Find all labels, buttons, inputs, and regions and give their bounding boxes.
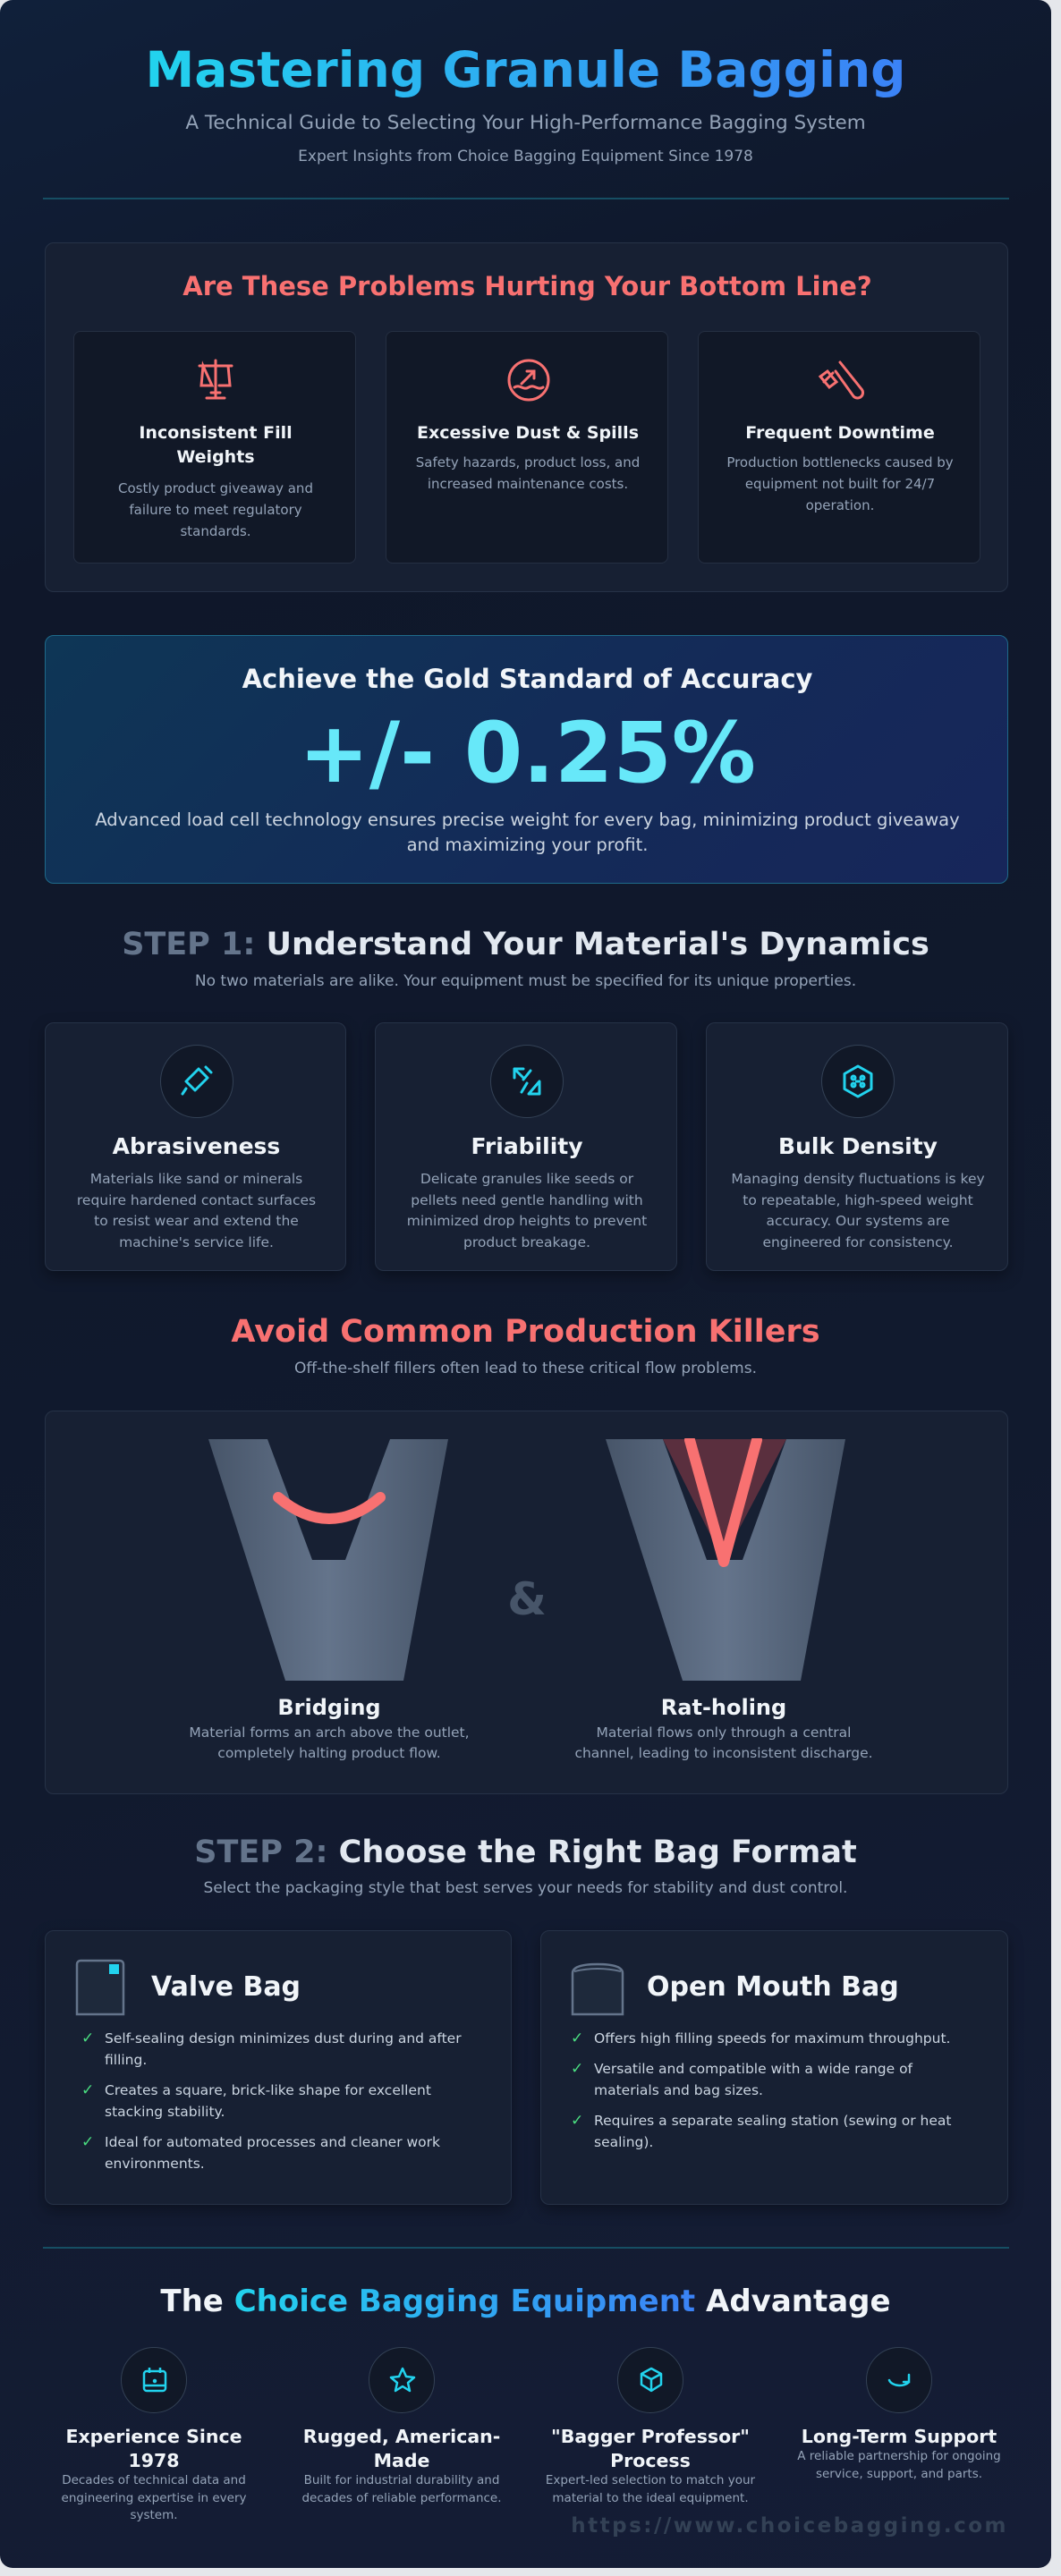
step 1 subtitle: No two materials are alike. Your equipment must be specified for its unique properties.	[195, 972, 856, 990]
text: Long-Term Support	[802, 2426, 997, 2447]
step 2 heading: STEP 2: Choose the Right Bag Format	[194, 1835, 857, 1870]
card text: Safety hazards, product loss, and increased maintenance costs.	[416, 454, 640, 492]
text: A reliable partnership for ongoing service, support, and parts.	[797, 2449, 1001, 2481]
big number: +/- 0.25%	[299, 705, 756, 802]
card: valve bag	[45, 1930, 512, 2205]
icon: friability	[490, 1045, 564, 1118]
step 2 subtitle: Select the packaging style that best serves your needs for stability and dust control.	[204, 1879, 847, 1897]
text: Expert-led selection to match your material to the ideal equipment.	[546, 2473, 755, 2504]
advantage: support	[797, 2347, 1001, 2481]
advantage heading: The Choice Bagging Equipment Advantage	[160, 2284, 891, 2319]
panel: problems	[45, 242, 1008, 592]
card title: Excessive Dust & Spills	[417, 423, 639, 443]
title: Bulk Density	[778, 1133, 938, 1159]
text: Materials like sand or minerals require hardened contact surfaces to resist wear and extend the machine's service life.	[77, 1171, 316, 1250]
panel: flow problems	[45, 1411, 1008, 1794]
card: friability	[375, 1022, 677, 1271]
label: bridging: Bridging	[277, 1695, 381, 1720]
text: Built for industrial durability and decades of reliable performance.	[301, 2473, 502, 2504]
label: rat-holing	[574, 1695, 873, 1761]
icon: open mouth bag	[571, 1962, 624, 2016]
label: bridging: Material forms an arch above the outlet, completely halting product flow.	[189, 1724, 470, 1761]
bullet list: Offers high filling speeds for maximum throughput.	[594, 2030, 950, 2046]
bullet list	[84, 2030, 462, 2172]
killers subtitle: Off-the-shelf fillers often lead to these critical flow problems.	[294, 1360, 757, 1377]
text: Rugged, American-Made	[303, 2426, 500, 2471]
icon: density	[821, 1045, 895, 1118]
label: bridging	[189, 1695, 470, 1761]
icon: calendar	[121, 2347, 187, 2413]
panel: accuracy	[45, 635, 1008, 884]
text: Decades of technical data and engineering expertise in every system.	[62, 2473, 246, 2522]
text: Delicate granules like seeds or pellets need gentle handling with minimized drop heights to prevent product breakage.	[407, 1171, 647, 1250]
step 1 heading: STEP 1: Understand Your Material's Dynamics	[122, 927, 929, 962]
icon: valve bag	[75, 1959, 125, 2016]
icon: support	[866, 2347, 932, 2413]
card: open mouth bag	[540, 1930, 1008, 2205]
icon: dust	[508, 360, 549, 401]
tagline: Expert Insights from Choice Bagging Equipment Since 1978	[298, 148, 753, 165]
card: downtime	[698, 331, 980, 564]
card: abrasiveness	[45, 1022, 346, 1271]
text: "Bagger Professor" Process	[551, 2426, 750, 2471]
bullet list	[573, 2030, 952, 2150]
subtitle: A Technical Guide to Selecting Your High-Performance Bagging System	[185, 112, 866, 134]
icon: star	[369, 2347, 435, 2413]
advantage: experience	[62, 2347, 246, 2522]
card text: Production bottlenecks caused by equipment not built for 24/7 operation.	[726, 454, 954, 513]
label: rat-holing: Rat-holing	[661, 1695, 786, 1720]
label: rat-holing: channel, leading to inconsistent discharge.	[574, 1745, 873, 1761]
label: rat-holing: Material flows only through a central	[597, 1724, 851, 1741]
icon: cube	[617, 2347, 683, 2413]
title: Abrasiveness	[113, 1133, 280, 1159]
title: Open Mouth Bag	[647, 1971, 899, 2003]
bullet list: Ideal for automated processes and cleaner work environments.	[105, 2134, 440, 2172]
title: Valve Bag	[151, 1971, 301, 2003]
problems heading: Are These Problems Hurting Your Bottom Line?	[182, 271, 872, 301]
bullet list: Requires a separate sealing station (sewing or heat sealing).	[594, 2113, 951, 2150]
card title: Frequent Downtime	[745, 423, 935, 443]
card: inconsistent fill weights	[73, 331, 356, 564]
advantage: rugged	[301, 2347, 502, 2504]
diagram: bridging	[208, 1439, 448, 1681]
icon: abrasive	[160, 1045, 233, 1118]
bullet list: Creates a square, brick-like shape for excellent stacking stability.	[105, 2082, 431, 2120]
icon: scale	[199, 360, 233, 399]
card text: Costly product giveaway and failure to meet regulatory standards.	[118, 480, 313, 539]
card title: Inconsistent Fill Weights	[139, 423, 293, 467]
advantage: bagger professor	[546, 2347, 755, 2504]
ampersand: &	[507, 1573, 547, 1625]
killers heading: Avoid Common Production Killers	[231, 1314, 820, 1350]
title: Friability	[471, 1133, 583, 1159]
icon: wrench	[818, 360, 864, 399]
card: dust & spills	[386, 331, 668, 564]
accuracy text: Advanced load cell technology ensures precise weight for every bag, minimizing product giveaway and maximizing your profit.	[95, 809, 960, 855]
url footer: https://www.choicebagging.com	[571, 2514, 1008, 2538]
text: Experience Since 1978	[65, 2426, 242, 2471]
accuracy heading: Achieve the Gold Standard of Accuracy	[242, 664, 812, 694]
title: Mastering Granule Bagging	[145, 41, 905, 98]
bullet list: Self-sealing design minimizes dust during and after filling.	[105, 2030, 462, 2068]
card: bulk density	[706, 1022, 1008, 1271]
diagram: rat-holing	[606, 1438, 845, 1681]
bullet list: Versatile and compatible with a wide range of materials and bag sizes.	[594, 2061, 912, 2098]
text: Managing density fluctuations is key to repeatable, high-speed weight accuracy. Our systems are engineered for consistency.	[731, 1171, 985, 1250]
